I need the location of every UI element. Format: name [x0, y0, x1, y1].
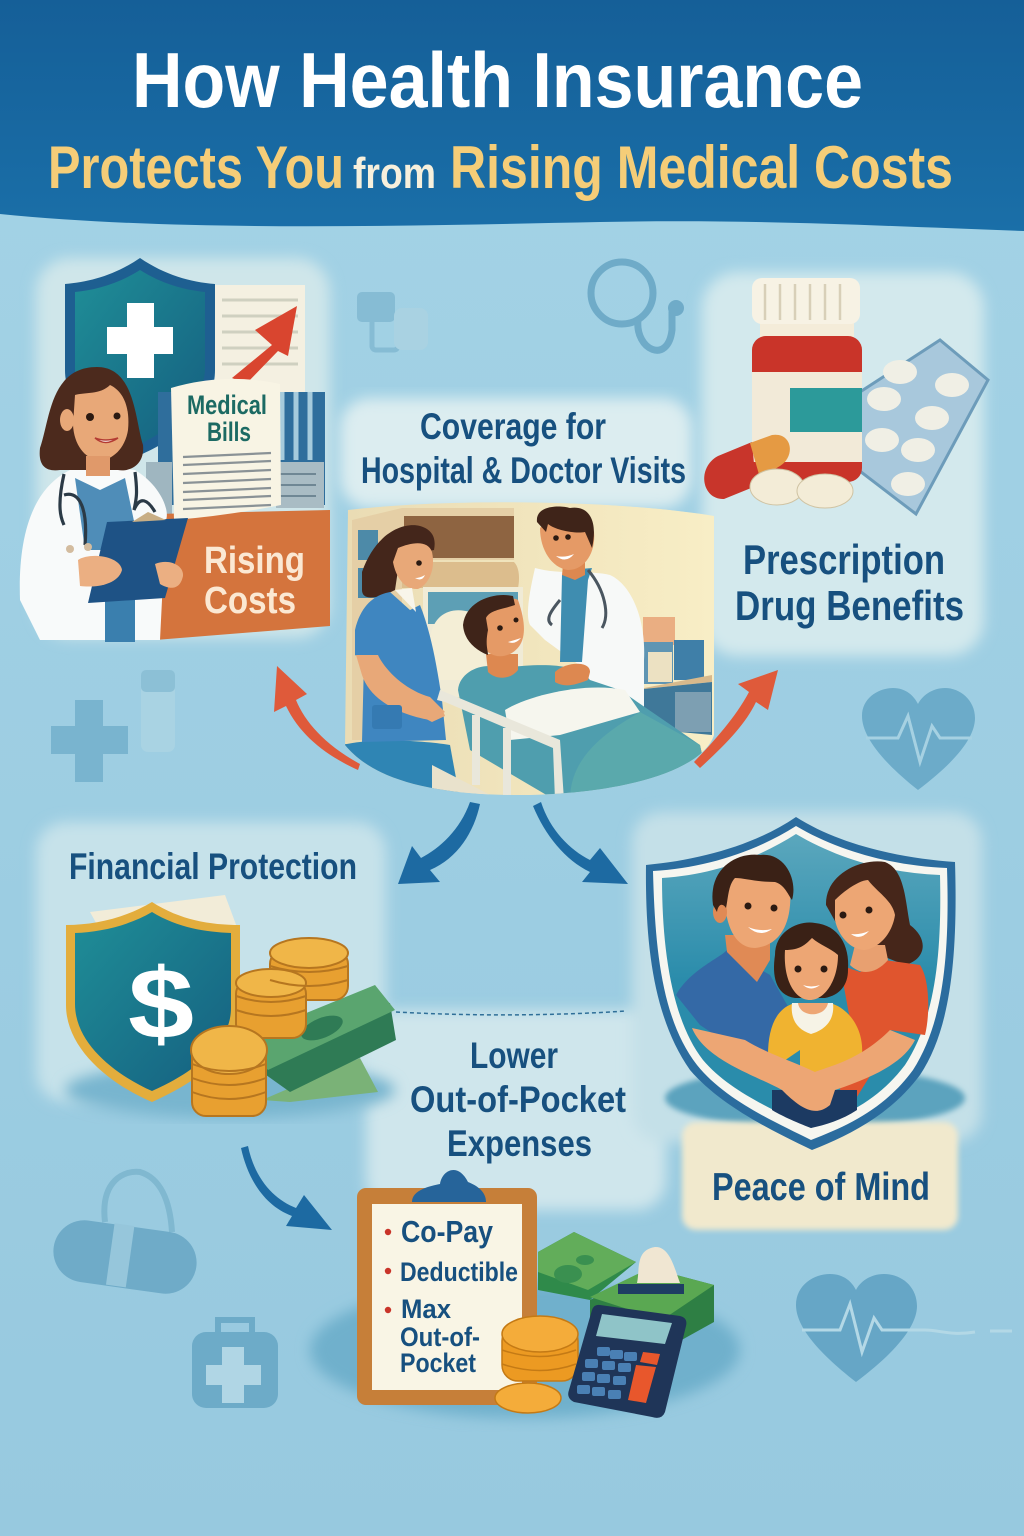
header banner	[0, 0, 1024, 231]
medical bills document	[171, 379, 281, 520]
heading: coverage: Coverage for	[420, 406, 606, 447]
icon: money stacks	[538, 1232, 714, 1352]
orange rising costs block	[155, 510, 330, 640]
nurse	[355, 525, 446, 742]
arrow: rising cost	[232, 306, 297, 384]
heading: coverage: Hospital & Doctor Visits	[361, 450, 686, 491]
decorative icon: medical cross and bottle	[51, 670, 175, 782]
heading: lower out of pocket: Out-of-Pocket	[410, 1079, 626, 1120]
arrow: blue to clipboard	[241, 1146, 332, 1230]
medical bills document: Bills	[207, 417, 251, 447]
child	[768, 922, 862, 1128]
heading: lower out of pocket: Expenses	[447, 1123, 592, 1164]
arrow: red right	[694, 670, 778, 768]
icon: blister pack	[848, 340, 988, 514]
nurse face	[415, 560, 425, 579]
hospital room scene	[342, 501, 716, 800]
icon: clipboard: Out-of-	[400, 1322, 480, 1352]
arrow: blue down left	[398, 802, 480, 884]
heading: prescription: Drug Benefits	[735, 582, 964, 629]
title: Protects You	[48, 134, 344, 201]
label: peace of mind: Peace of Mind	[712, 1166, 930, 1209]
doctor	[528, 506, 644, 716]
medical bills document: Medical	[187, 390, 267, 420]
panel: rising costs	[20, 258, 330, 642]
title: from	[353, 149, 436, 198]
title: How Health Insurance	[132, 36, 863, 124]
decorative icon: heart top right	[862, 688, 975, 790]
icon: gold coins	[191, 938, 348, 1116]
icon: dollar shield	[66, 895, 240, 1102]
icon: family shield	[646, 817, 956, 1150]
panel: peace of mind	[646, 817, 956, 1209]
panel: prescription drug benefits	[704, 278, 988, 629]
heading: financial protection: Financial Protection	[69, 846, 357, 887]
hands	[692, 1028, 915, 1111]
decorative icon: stethoscope	[591, 262, 684, 350]
panel: financial protection	[66, 846, 396, 1116]
icon: clipboard: Pocket	[400, 1348, 476, 1378]
mother	[826, 861, 928, 1100]
icon: clipboard	[357, 1170, 537, 1405]
icon: pill bottle	[752, 278, 862, 482]
icon: stacked paper	[146, 285, 325, 514]
panel backdrops	[36, 258, 984, 1418]
icon: capsule and tablets	[704, 435, 853, 508]
heading: prescription: Prescription	[743, 536, 945, 583]
icon: cash stack	[240, 985, 396, 1102]
icon: clipboard: Co-Pay	[401, 1214, 494, 1249]
icon: shield with cross	[65, 258, 215, 455]
shelving	[643, 617, 712, 735]
decorative icon: pills top	[357, 292, 428, 350]
heading: coverage	[361, 406, 686, 491]
patient	[463, 595, 524, 678]
icon: clipboard: Max	[401, 1294, 451, 1324]
dashed connector	[396, 1011, 626, 1015]
icon: coins	[495, 1316, 578, 1413]
arrow: red left	[274, 666, 360, 770]
doctor illustration	[20, 367, 188, 642]
icon: dollar shield: $	[128, 948, 194, 1060]
orange rising costs block: Rising	[204, 540, 305, 582]
heading: lower out of pocket	[410, 1035, 626, 1164]
father	[676, 855, 793, 1065]
icon: clipboard: Deductible	[400, 1257, 518, 1287]
icon: calculator	[568, 1305, 686, 1418]
decorative icon: pill bag	[49, 1172, 201, 1298]
bed	[432, 665, 712, 800]
doctor hand	[555, 664, 590, 685]
panel: hospital	[342, 406, 716, 800]
heading: lower out of pocket: Lower	[470, 1035, 558, 1076]
heading: prescription	[735, 536, 964, 629]
title	[48, 36, 953, 201]
nurse hand on rail	[426, 712, 445, 722]
decorative icon: heart bottom right	[796, 1274, 1012, 1382]
orange rising costs block: Costs	[204, 580, 296, 622]
panel: lower out-of-pocket	[357, 1035, 714, 1418]
decorative icon: first aid kit	[192, 1320, 278, 1408]
floor shade	[345, 740, 458, 792]
arrow: blue down right	[533, 802, 628, 884]
